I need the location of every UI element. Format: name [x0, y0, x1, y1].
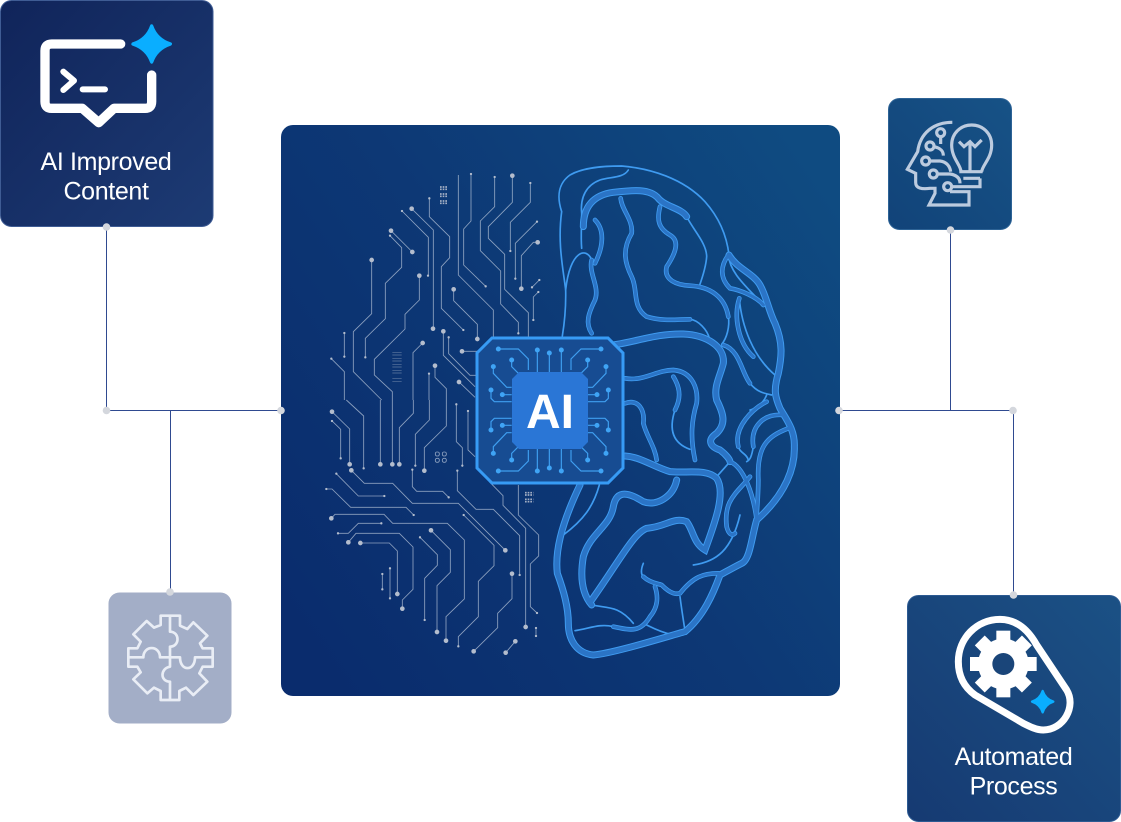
- gear: [970, 631, 1037, 697]
- neural brain half: [557, 166, 794, 655]
- icon: blue sparkle: [1032, 691, 1053, 712]
- panel: central AI brain: [281, 125, 840, 696]
- card background: [108, 592, 232, 724]
- card: puzzle gear: [108, 592, 232, 724]
- AI chip: [477, 338, 623, 483]
- card background: [908, 596, 1120, 822]
- chip body: [477, 338, 623, 483]
- card: Automated Process: [908, 596, 1120, 822]
- card: AI Improved Content: [0, 0, 213, 226]
- card title: Content: [63, 178, 149, 206]
- circuit half of brain: upper: [331, 174, 539, 400]
- icon: head with circuit and lightbulb: [907, 122, 992, 205]
- chip core: [512, 372, 588, 449]
- icon: puzzle pieces gear: [128, 616, 213, 700]
- circuit half of brain: lower: [326, 400, 539, 653]
- card background: [0, 0, 213, 226]
- connector lines: left: [106, 227, 281, 592]
- card title: AI Improved: [41, 148, 171, 176]
- chip traces: [491, 349, 608, 471]
- icon: chat bubble with terminal prompt: [45, 26, 170, 123]
- icon: gear in capsule: [958, 619, 1070, 730]
- icon: blue sparkle: [133, 26, 170, 62]
- card: head and lightbulb: [888, 98, 1012, 230]
- connector lines: right: [839, 230, 1014, 595]
- card title: Automated: [955, 743, 1072, 771]
- card title: Process: [970, 772, 1057, 800]
- panel background: [281, 125, 840, 696]
- chip label: AI: [526, 386, 574, 439]
- connector dots: [103, 223, 1017, 599]
- card background: [888, 98, 1012, 230]
